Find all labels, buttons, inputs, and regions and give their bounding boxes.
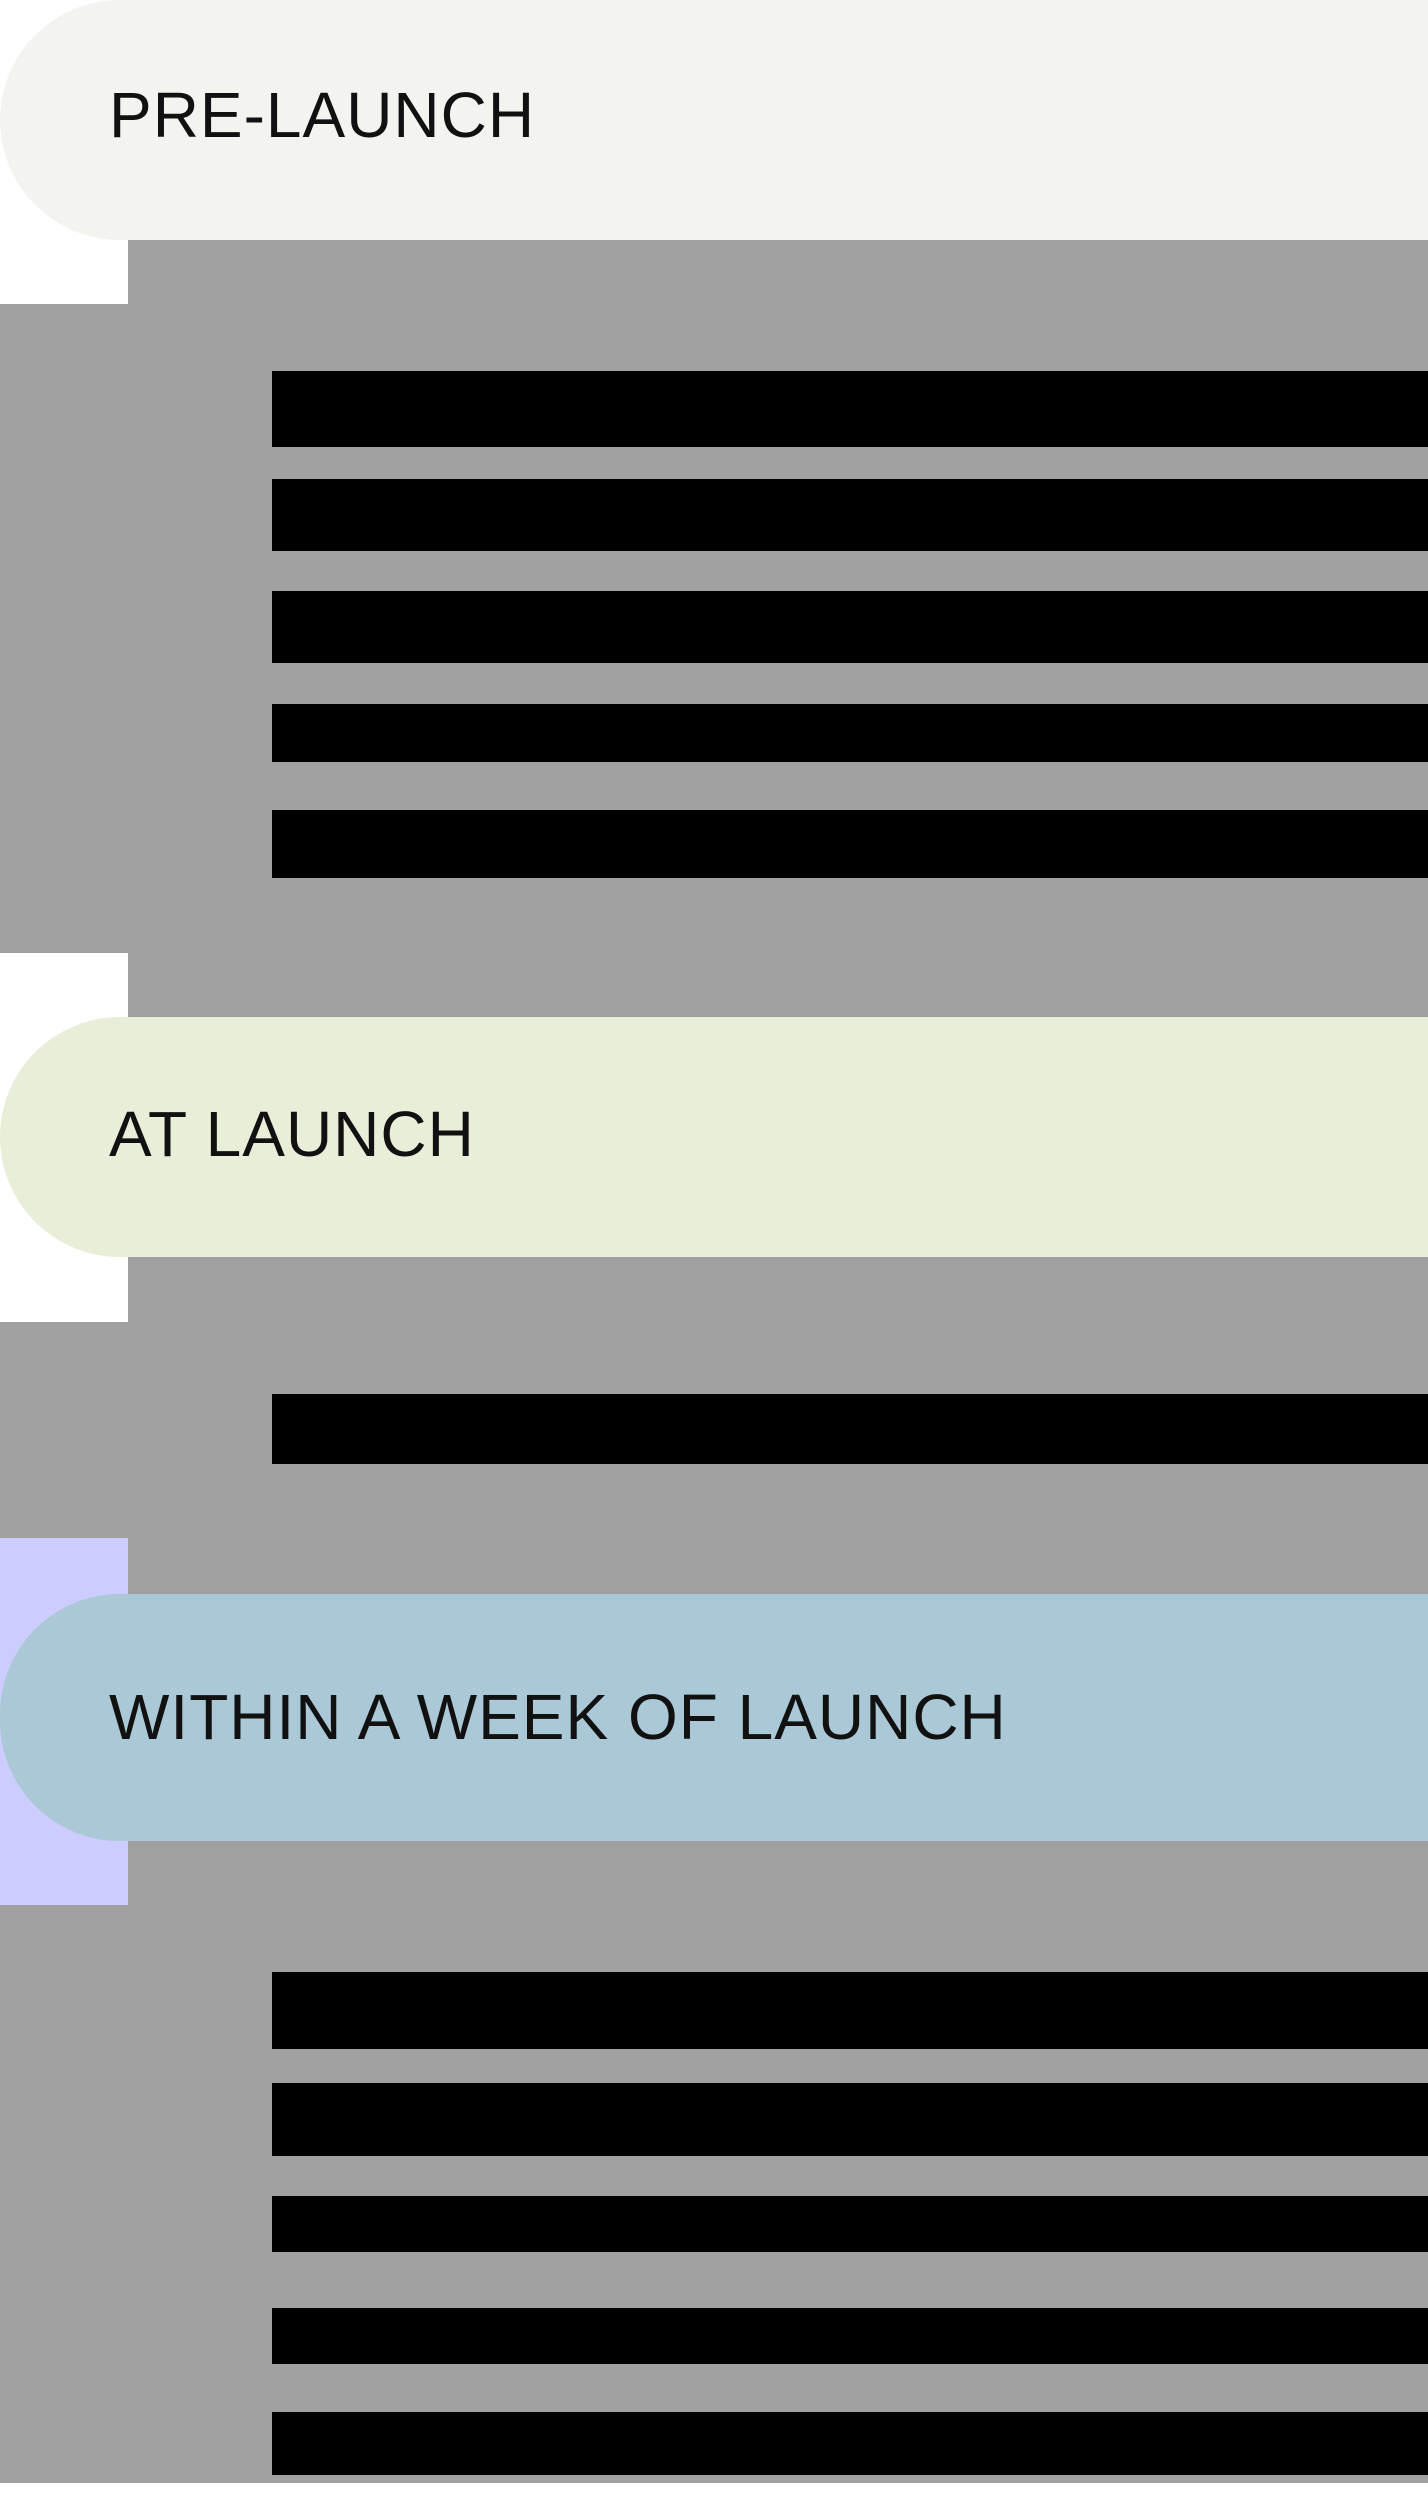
text block: pre-launch items: Pre-launch item three text: [272, 591, 616, 624]
text block: within a week items: [272, 1972, 1428, 2475]
text block: pre-launch items: Pre-launch item five text: [272, 810, 594, 843]
text block: pre-launch items: Pre-launch item four text: [272, 704, 599, 737]
text block: pre-launch items: [272, 371, 1428, 878]
panel: at launch heading: AT LAUNCH: [109, 1098, 475, 1170]
text block: within a week items: Week item two text: [272, 2083, 525, 2116]
panel: within a week heading: WITHIN A WEEK OF LAUNCH: [109, 1681, 1007, 1753]
text block: within a week items: Week item five text: [272, 2412, 525, 2445]
text block: within a week items: Week item one text: [272, 1972, 528, 2005]
panel: at launch heading: [0, 1017, 1428, 1257]
text block: within a week items: Week item three text: [272, 2196, 547, 2229]
text block: at launch item: [272, 1394, 1428, 1464]
text block: within a week items: Week item four text: [272, 2308, 530, 2341]
text block: pre-launch items: Pre-launch item two text: [272, 479, 594, 512]
panel: pre-launch heading: PRE-LAUNCH: [109, 79, 535, 151]
text block: pre-launch items: Pre-launch item one text: [272, 371, 597, 404]
lavender marker: [0, 1538, 128, 1905]
panel: within a week heading: [0, 1594, 1428, 1841]
text block: at launch item: At launch item text: [272, 1394, 519, 1427]
panel: pre-launch heading: [0, 0, 1428, 240]
